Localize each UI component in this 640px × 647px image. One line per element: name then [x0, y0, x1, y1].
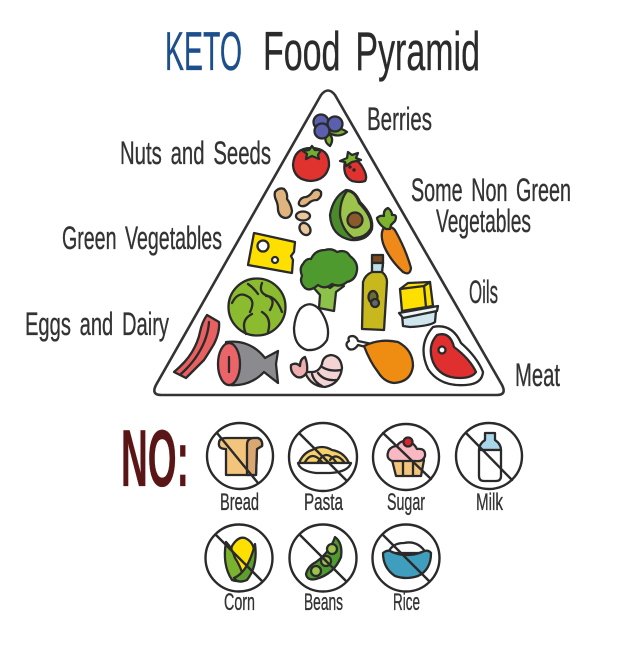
title: Food Pyramid [263, 20, 480, 82]
label: nuts and seeds: Nuts and Seeds [120, 135, 271, 171]
icon: shrimp [291, 355, 342, 387]
label: beans: Beans [304, 589, 343, 616]
icon: butter [399, 282, 438, 327]
icon: no bread [207, 423, 273, 489]
label: sugar: Sugar [387, 489, 425, 516]
icon: ham [218, 342, 278, 385]
icon: bacon [174, 315, 219, 378]
icon: no rice [372, 524, 440, 592]
infographic: keto food pyramid: NO: [121, 414, 189, 504]
title [165, 20, 480, 82]
label: pasta: Pasta [304, 489, 343, 516]
icon: avocado [330, 190, 372, 240]
icon: cheese [248, 233, 295, 273]
label: rice: Rice [393, 589, 420, 616]
icon: chicken leg [346, 336, 413, 383]
label: green vegetables: Green Vegetables [62, 220, 222, 256]
title: KETO [165, 20, 242, 82]
icon: egg [294, 304, 328, 350]
label: eggs and dairy: Eggs and Dairy [25, 306, 169, 342]
icon: no sugar [373, 424, 439, 490]
icon: strawberry [340, 152, 366, 182]
icon: cabbage [228, 278, 286, 336]
icon: steak [424, 326, 483, 385]
label: some non green vegetables [411, 172, 571, 239]
label: corn: Corn [224, 589, 255, 616]
icon: no pasta [289, 423, 357, 491]
icon: blueberries [314, 114, 347, 146]
icon: no beans [290, 524, 356, 592]
icon: peanuts [275, 188, 321, 237]
icon: broccoli [301, 249, 357, 311]
icon: carrot [377, 208, 411, 273]
label: berries: Berries [367, 101, 432, 137]
label: bread: Bread [220, 489, 259, 516]
pyramid outline [154, 90, 504, 395]
icon: no milk [456, 423, 522, 489]
icon: oil bottle [362, 255, 387, 330]
label: some non green vegetables: Vegetables [436, 203, 531, 239]
icon: tomato [293, 146, 329, 181]
label: milk: Milk [476, 489, 504, 516]
label: oils: Oils [469, 274, 498, 310]
label: meat: Meat [515, 357, 560, 393]
icon: no corn [206, 524, 272, 592]
